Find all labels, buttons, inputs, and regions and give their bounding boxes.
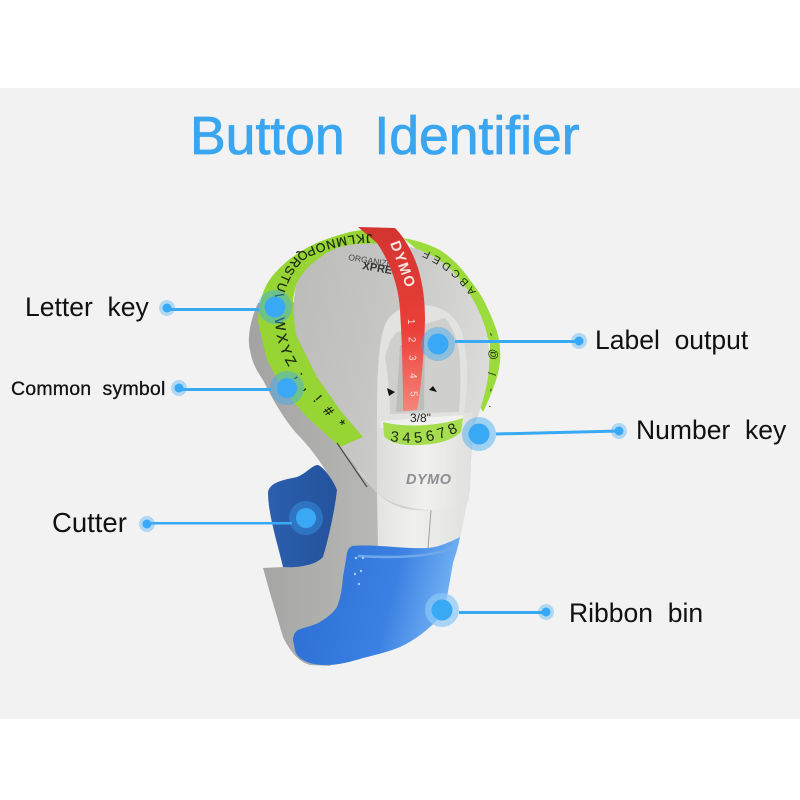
ribbon bin bbox=[293, 537, 460, 665]
ribbon numbers: 12345 bbox=[405, 319, 419, 409]
white band under window bbox=[381, 415, 463, 428]
green letter ring, right side bbox=[403, 238, 500, 412]
grey outer shell and handle bbox=[249, 300, 380, 666]
connector line bbox=[496, 431, 620, 434]
label: Ribbon bin bbox=[569, 598, 703, 628]
label: Letter key bbox=[25, 292, 149, 322]
label: Number key bbox=[636, 415, 787, 445]
panel seam bbox=[428, 510, 431, 549]
window arrow right bbox=[429, 386, 437, 392]
small marker bbox=[159, 300, 175, 316]
window arrow left bbox=[387, 388, 395, 396]
label: Label output bbox=[595, 325, 749, 355]
bin vent dots bbox=[354, 557, 364, 585]
width marking: 3/8" bbox=[410, 411, 431, 425]
front panel upper bbox=[377, 412, 474, 510]
small marker bbox=[571, 333, 587, 349]
title: Button Identifier bbox=[190, 107, 580, 166]
connector line bbox=[455, 340, 580, 343]
green number wheel bbox=[383, 418, 463, 445]
ribbon DYMO embossing: DYMO bbox=[386, 239, 418, 291]
large marker bbox=[258, 290, 292, 324]
small marker bbox=[171, 380, 187, 396]
leader: Cutter bbox=[52, 501, 323, 538]
label: Common symbol bbox=[11, 378, 166, 400]
number wheel digits: 345678 bbox=[390, 424, 457, 443]
window recess bbox=[385, 318, 460, 414]
ring letters upper left: JKLMNOPQRSTUV bbox=[274, 234, 372, 297]
panel shadow line bbox=[337, 443, 367, 487]
lower front panel bbox=[357, 430, 472, 550]
small marker bbox=[139, 516, 155, 532]
large marker bbox=[425, 593, 459, 627]
ring letters lower left: WXYZ ; , ! # * bbox=[275, 317, 345, 425]
red ribbon bbox=[358, 227, 425, 411]
ring symbols right: . - / @ - bbox=[488, 333, 498, 407]
cutter button bbox=[268, 465, 337, 567]
leader: Common symbol bbox=[11, 371, 304, 405]
window slot bbox=[396, 345, 425, 412]
connector line bbox=[179, 388, 271, 391]
large marker bbox=[270, 371, 304, 405]
connector line bbox=[147, 522, 292, 524]
window rim bbox=[377, 305, 467, 425]
connector line bbox=[459, 611, 546, 614]
leader: Number key bbox=[462, 415, 787, 451]
small marker bbox=[611, 423, 627, 439]
leader: Ribbon bin bbox=[425, 593, 703, 628]
connector line bbox=[167, 308, 259, 311]
small marker bbox=[538, 604, 554, 620]
DYMO logo: DYMO bbox=[406, 472, 452, 488]
background panel bbox=[0, 88, 800, 719]
model text bold: XPRESS bbox=[361, 260, 408, 280]
device: label maker bbox=[248, 227, 500, 666]
leader: Label output bbox=[421, 325, 749, 361]
model text: ORGANIZER bbox=[348, 252, 399, 270]
large marker bbox=[462, 417, 496, 451]
green letter ring, left side bbox=[258, 228, 390, 447]
leader: Letter key bbox=[25, 290, 292, 324]
main dome bbox=[294, 244, 489, 510]
label: Cutter bbox=[52, 507, 127, 538]
large marker bbox=[421, 327, 455, 361]
large marker bbox=[289, 501, 323, 535]
ring letters upper right: ABCDEF bbox=[422, 252, 476, 294]
bin highlight bbox=[358, 547, 455, 557]
